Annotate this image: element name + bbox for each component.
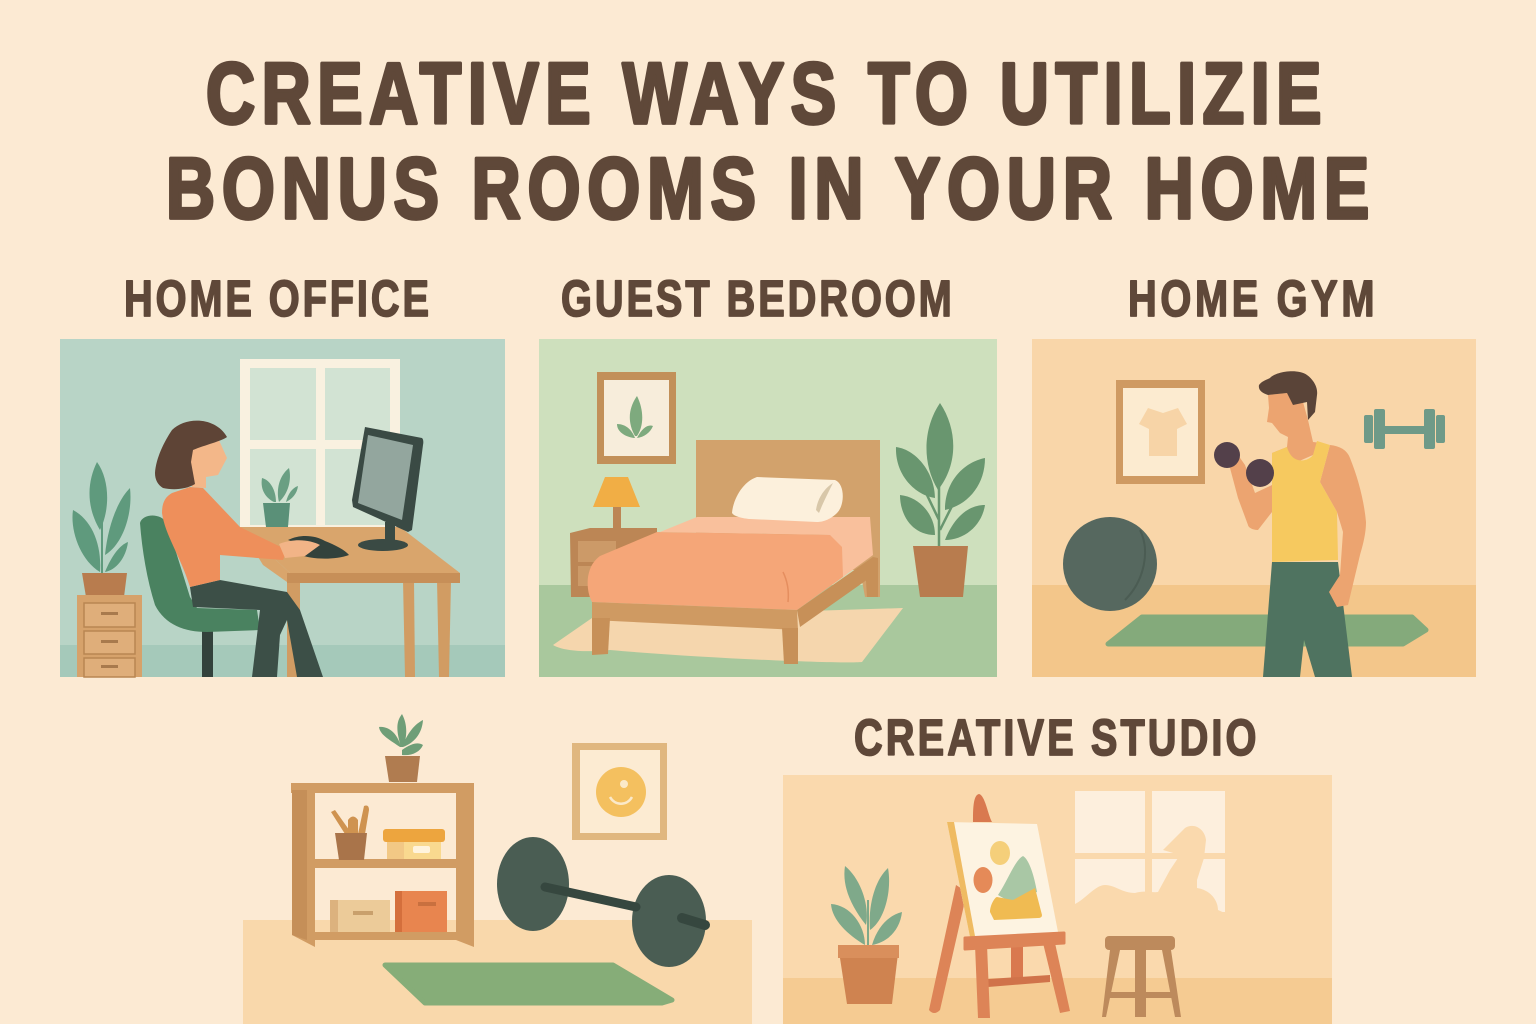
title: CREATIVE WAYS TO UTILIZIE — [206, 46, 1321, 142]
heading: home office: HOME OFFICE — [124, 270, 429, 327]
icon: exercise ball — [1063, 517, 1157, 611]
icon: yoga mat — [1108, 617, 1426, 644]
icon: storage box beige — [330, 900, 390, 932]
icon: floor plant — [72, 462, 130, 597]
icon: wall picture — [1116, 380, 1205, 484]
icon: monitor — [352, 427, 423, 551]
panel: guest bedroom — [539, 339, 997, 677]
person — [155, 421, 323, 677]
icon: wall picture — [597, 372, 676, 464]
heading: home gym: HOME GYM — [1128, 270, 1374, 327]
icon: stool — [1102, 936, 1181, 1017]
icon: bookshelf — [291, 783, 474, 947]
icon: storage box yellow — [383, 829, 445, 859]
icon: office chair — [140, 515, 260, 677]
icon: nightstand — [570, 528, 657, 597]
icon: large plant — [896, 403, 985, 597]
bed frame — [592, 557, 878, 664]
icon: smiley picture — [572, 743, 667, 840]
icon: keyboard and mouse — [288, 536, 349, 559]
icon: shelf plant — [379, 714, 423, 782]
icon: yoga mat — [385, 965, 672, 1003]
window — [1073, 791, 1227, 925]
icon: barbell — [497, 837, 706, 967]
title — [166, 46, 1369, 237]
heading: creative studio: CREATIVE STUDIO — [854, 709, 1256, 766]
icon: desk — [240, 527, 460, 677]
panel: home office — [60, 339, 505, 677]
person with dumbbell — [1214, 371, 1366, 677]
icon: bed — [588, 440, 880, 664]
panel: home gym and storage corner — [243, 714, 752, 1024]
icon: potted plant — [831, 866, 902, 1004]
window — [240, 359, 400, 534]
icon: filing cabinet — [77, 595, 142, 677]
icon: storage box orange — [395, 891, 447, 932]
panel: home gym — [1032, 339, 1476, 677]
title: BONUS ROOMS IN YOUR HOME — [166, 141, 1369, 237]
icon: wall dumbbell — [1364, 409, 1445, 449]
icon: table lamp — [593, 477, 640, 529]
heading: guest bedroom: GUEST BEDROOM — [561, 270, 952, 327]
icon: small desk plant — [262, 468, 298, 527]
icon: pencil cup — [331, 806, 369, 860]
icon: rug — [553, 608, 903, 662]
panel: creative studio — [783, 775, 1332, 1024]
icon: easel with painting — [929, 794, 1070, 1018]
